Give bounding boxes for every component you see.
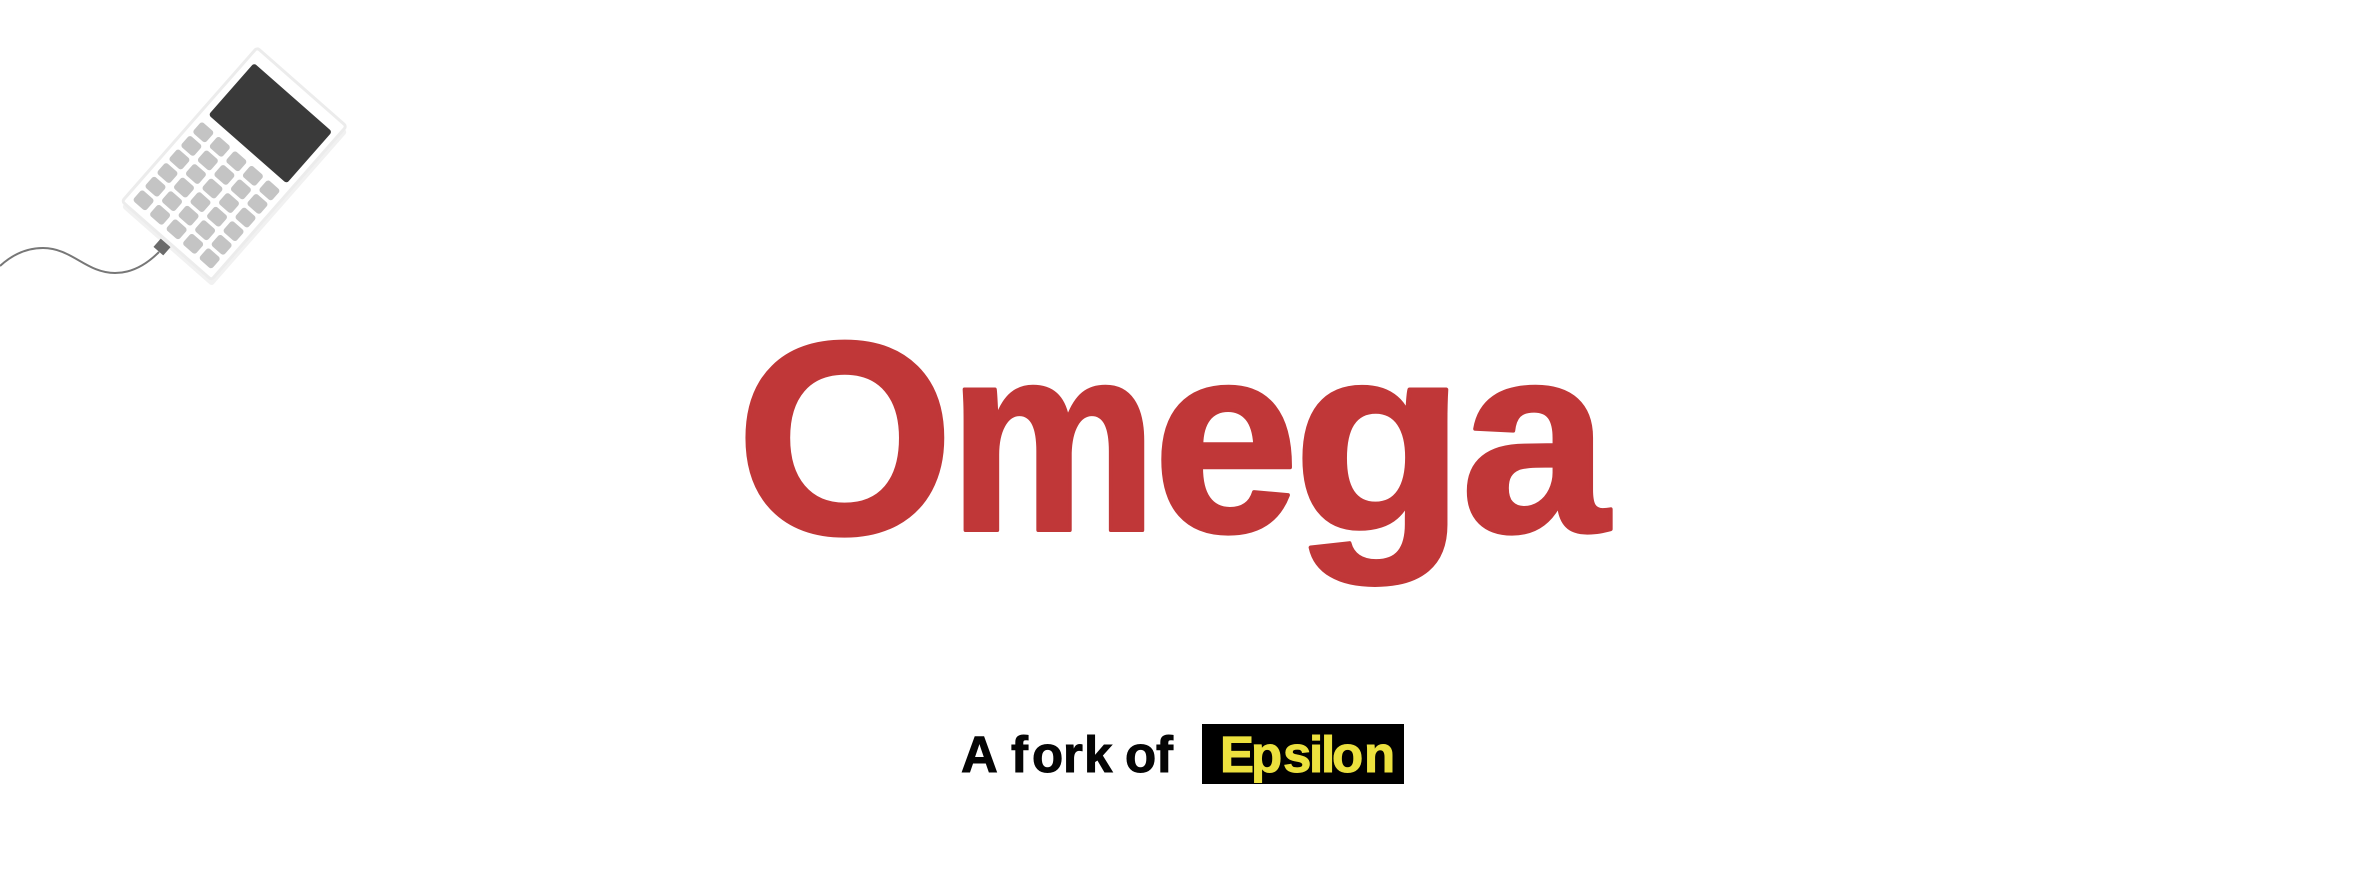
calculator keys	[132, 121, 281, 269]
title: a	[1461, 288, 1611, 588]
cable	[0, 248, 159, 273]
title: e	[1153, 288, 1299, 588]
icon: calculator with cable	[0, 48, 350, 286]
title: O	[736, 286, 954, 592]
title: g	[1293, 290, 1465, 587]
badge background	[1202, 724, 1404, 784]
cable connector	[153, 239, 171, 255]
subtitle: A fork of: A fork of	[961, 726, 1174, 783]
title: m	[949, 290, 1157, 587]
badge: Epsilon	[1202, 724, 1404, 784]
calculator screen	[208, 63, 332, 184]
calculator body	[119, 48, 350, 286]
badge text: Epsilon	[1220, 726, 1395, 783]
